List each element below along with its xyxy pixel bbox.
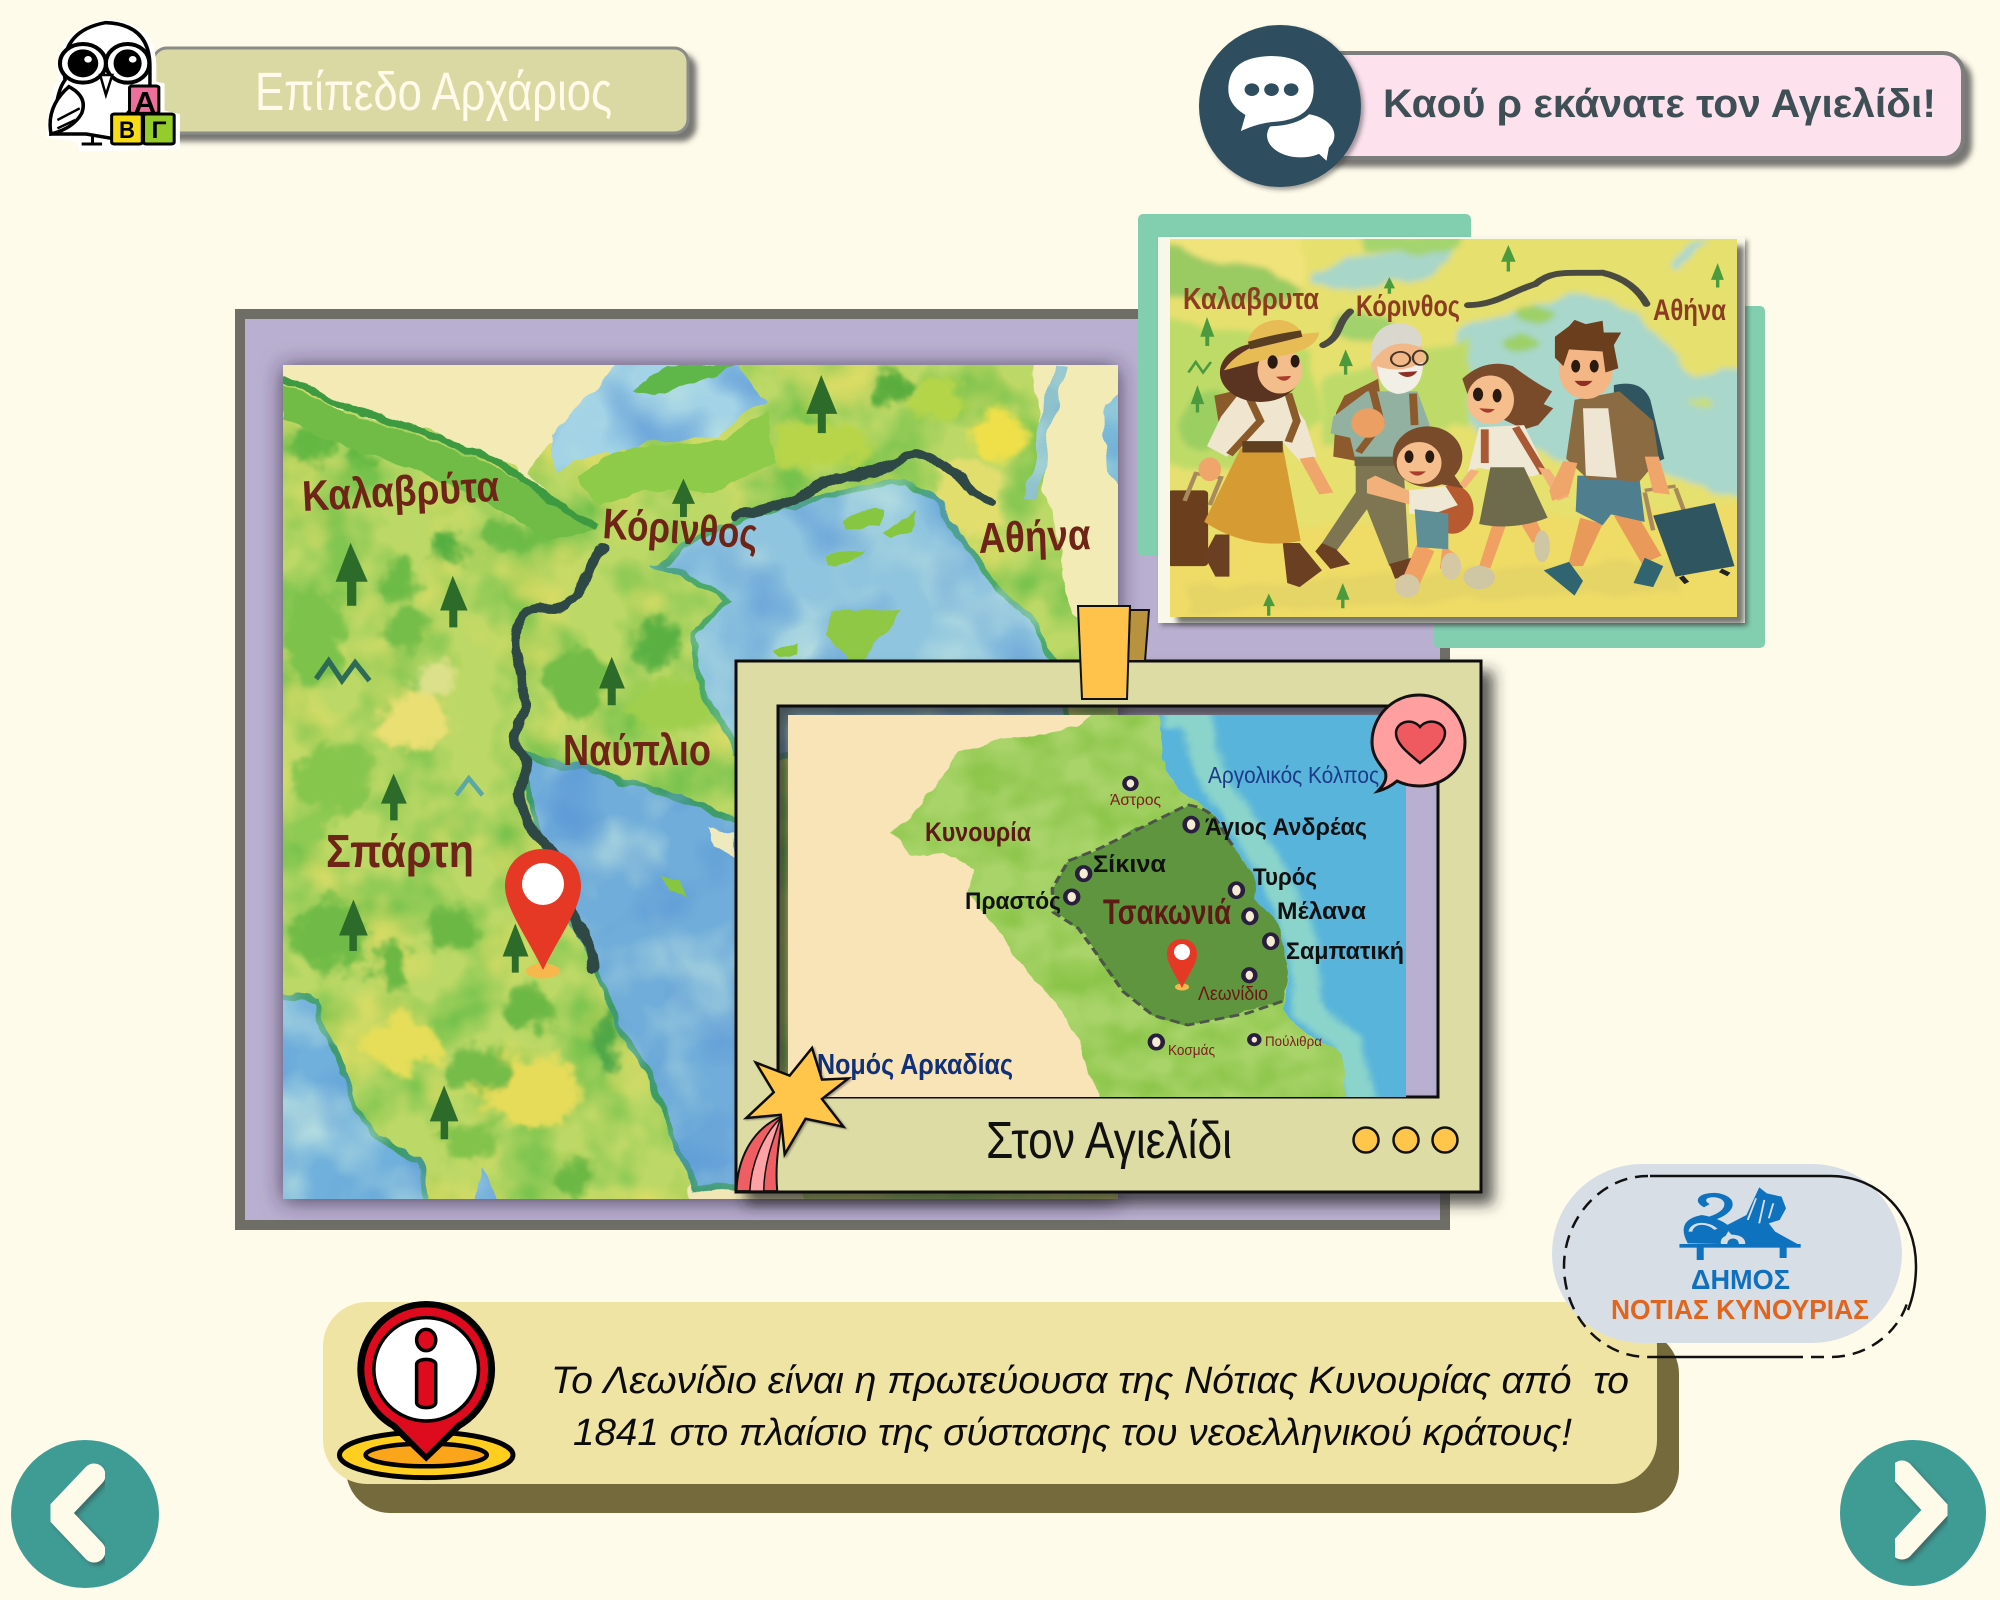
arrow: previous button xyxy=(11,1440,159,1588)
land base xyxy=(283,365,1118,1199)
Tsakonia dashed border xyxy=(1052,805,1282,1025)
indicator dots xyxy=(1354,1128,1458,1152)
icon: shooting star xyxy=(736,1048,848,1191)
label: Corinth: Κόρινθος xyxy=(601,500,759,559)
logo text xyxy=(1611,1264,1869,1325)
land xyxy=(892,711,1347,1102)
note body xyxy=(323,1302,1657,1484)
photo label: Kalavryta: Καλαβρυτα xyxy=(1183,281,1319,316)
note text xyxy=(551,1360,1629,1454)
level bar xyxy=(153,48,688,133)
note line one: Το Λεωνίδιο είναι η πρωτεύουσα της Νότιας Κυνουρίας από το xyxy=(551,1360,1629,1402)
panel: info note xyxy=(323,1301,1679,1513)
panel: level badge xyxy=(153,48,688,133)
panel: main map frame xyxy=(240,314,1445,1225)
icon: owl with alphabet blocks: Β xyxy=(119,117,135,144)
label: Nafplio: Ναύπλιο xyxy=(563,726,711,775)
paper areas xyxy=(264,348,1137,1217)
logo line one: ΔΗΜΟΣ xyxy=(1691,1264,1790,1295)
place markers xyxy=(1065,778,1277,1049)
icon: small location pin xyxy=(1167,939,1197,990)
label: Athens: Αθήνα xyxy=(978,511,1091,563)
label: Astros: Άστρος xyxy=(1110,792,1161,809)
note line two: 1841 στο πλαίσιο της σύστασης του νεοελληνικού κράτους! xyxy=(573,1412,1572,1454)
panel: postcard inset map xyxy=(736,606,1481,1192)
label: Kynouria: Κυνουρία xyxy=(925,817,1031,847)
icon: chat bubbles xyxy=(1199,25,1361,187)
label: Argolic Gulf: Αργολικός Κόλπος xyxy=(1208,762,1379,788)
block letters: Α xyxy=(134,87,156,119)
icon: winged lion emblem xyxy=(1679,1187,1801,1260)
figure: older girl xyxy=(1460,364,1569,589)
figure: boy xyxy=(1544,320,1735,596)
level title: Επίπεδο Αρχάριος xyxy=(255,62,612,122)
main map xyxy=(264,348,1137,1217)
label: Poulithra: Πούλιθρα xyxy=(1265,1033,1322,1049)
family background map xyxy=(1170,239,1737,616)
map labels xyxy=(301,463,1091,877)
icon: owl with alphabet blocks: Γ xyxy=(152,117,167,144)
label: Tyros: Τυρός xyxy=(1253,864,1317,891)
label: Melana: Μέλανα xyxy=(1277,898,1366,925)
note shadow xyxy=(346,1330,1679,1513)
panel: family illustration xyxy=(1154,227,1754,631)
photo label: Corinth: Κόρινθος xyxy=(1356,290,1460,323)
figure: woman with hat xyxy=(1168,320,1333,587)
logo line two: ΝΟΤΙΑΣ ΚΥΝΟΥΡΙΑΣ xyxy=(1611,1294,1869,1325)
label: Sampatiki: Σαμπατική xyxy=(1286,938,1404,965)
label: Kosmas: Κοσμάς xyxy=(1168,1042,1215,1059)
message pill xyxy=(1300,53,1963,158)
photo labels xyxy=(1183,281,1726,327)
icon: location pin xyxy=(505,849,581,978)
panel: congratulation message xyxy=(1199,25,1963,187)
label: Sikina: Σίκινα xyxy=(1093,851,1166,878)
panel: green backing rectangles xyxy=(1138,214,1765,648)
postcard frame xyxy=(736,661,1481,1192)
seas xyxy=(264,354,1125,1217)
family trees xyxy=(1188,245,1724,616)
label: Leonidio: Λεωνίδιο xyxy=(1198,984,1268,1005)
logo dashed outline xyxy=(1564,1176,1916,1357)
coast bands and islands xyxy=(283,365,916,897)
land washes xyxy=(285,370,1027,1197)
label: Kalavryta: Καλαβρύτα xyxy=(301,463,500,521)
inset map labels xyxy=(817,762,1404,1081)
logo background xyxy=(1552,1164,1902,1343)
label: Arcadia Prefecture: Νομός Αρκαδίας xyxy=(817,1049,1013,1081)
inset map xyxy=(788,707,1416,1102)
sea xyxy=(1153,707,1416,1102)
family roads xyxy=(1323,273,1646,345)
label: Prastos: Πραστός xyxy=(965,888,1061,915)
label: Tsakonia: Τσακωνιά xyxy=(1103,893,1231,932)
panel: municipality logo xyxy=(1552,1164,1916,1357)
icon: heart speech bubble xyxy=(1372,695,1465,791)
figure: grandfather xyxy=(1315,323,1430,579)
roads xyxy=(514,455,991,968)
trees and mountains xyxy=(316,375,837,1139)
icon: owl with alphabet blocks xyxy=(46,19,180,152)
figure: little girl xyxy=(1367,426,1474,598)
label: Sparta: Σπάρτη xyxy=(326,825,474,877)
icon: info pin xyxy=(339,1301,513,1478)
photo label: Athens: Αθήνα xyxy=(1653,294,1726,327)
icon: tape xyxy=(1078,606,1149,699)
postcard caption: Στον Αγιελίδι xyxy=(986,1112,1232,1170)
label: Agios Andreas: Άγιος Ανδρέας xyxy=(1205,814,1367,841)
arrow: next button xyxy=(1840,1440,1986,1586)
message text: Καού ρ εκάνατε τον Αγιελίδι! xyxy=(1383,82,1936,126)
Tsakonia region xyxy=(1052,805,1287,1025)
